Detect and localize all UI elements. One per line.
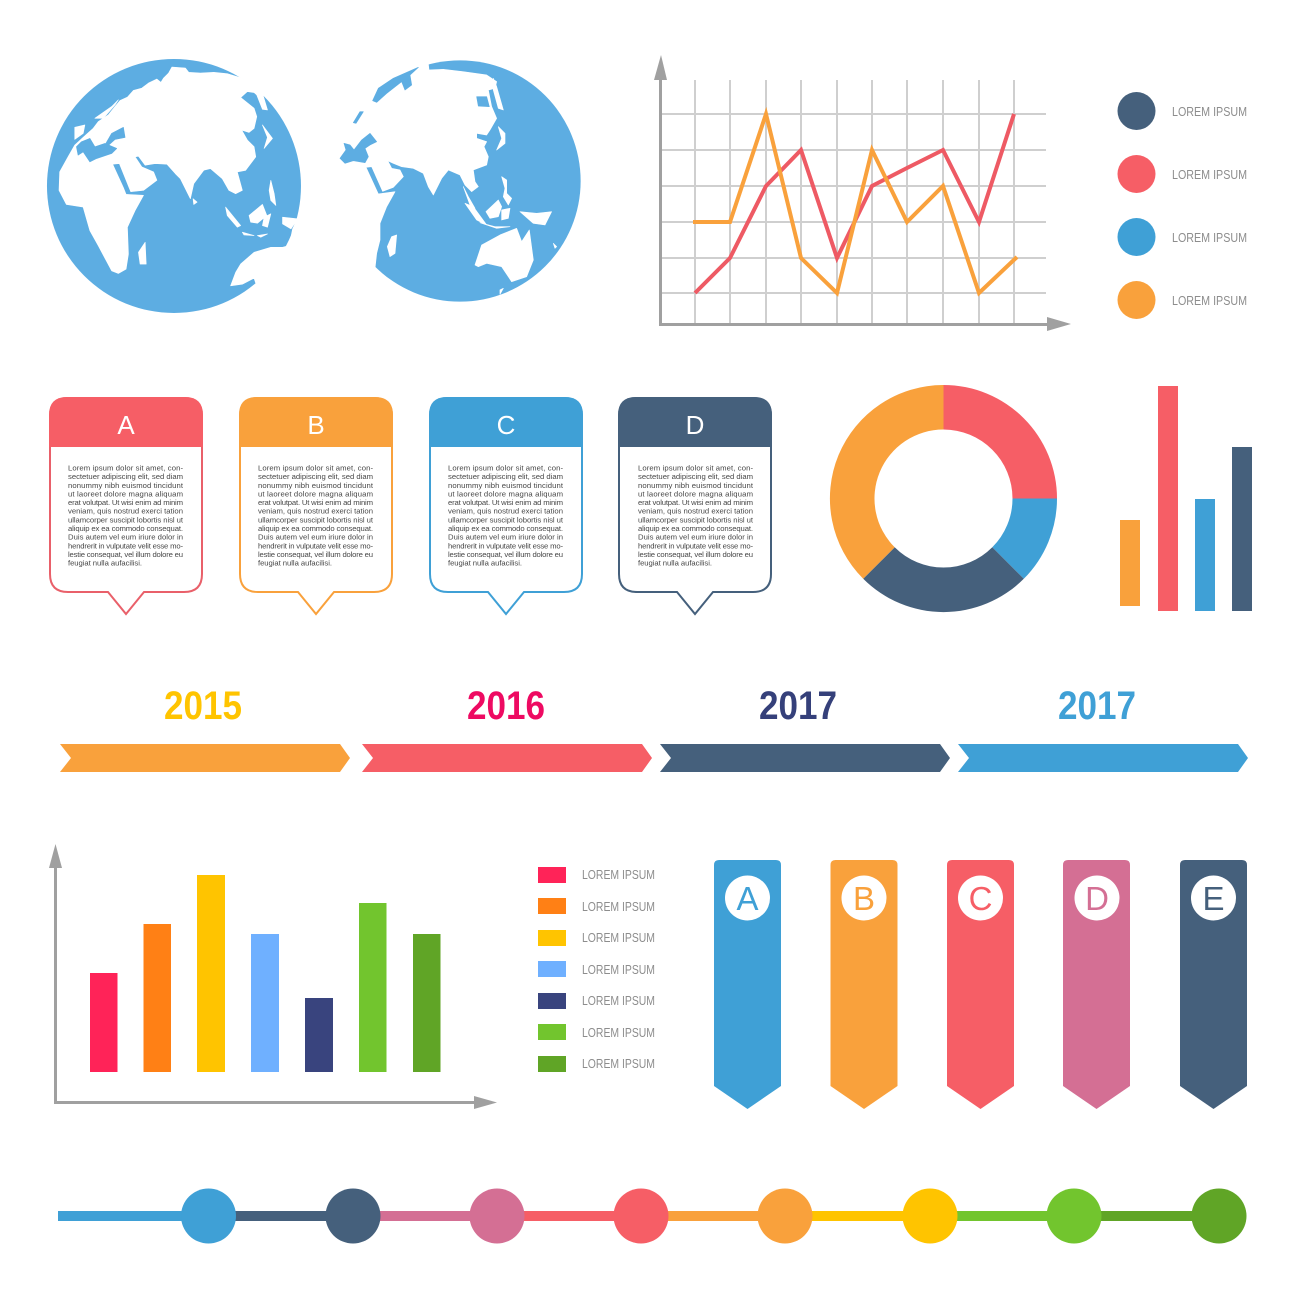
card D text: Lorem ipsum dolor sit amet, con- — [638, 464, 753, 472]
orange data line — [693, 114, 1017, 293]
legend: bar chart: LOREM IPSUM — [582, 993, 655, 1008]
globe: Asia and Australia view — [323, 47, 581, 302]
card C text: feugiat nulla aufacilisi. — [448, 558, 522, 568]
panel: line chart — [654, 55, 1071, 331]
ribbon E: E — [1202, 880, 1225, 917]
ribbon C: C — [969, 880, 992, 917]
card C text: veniam, quis nostrud exerci tation — [448, 507, 563, 516]
card A text: aliquip ex ea commodo consequat. — [68, 524, 183, 533]
panel: card B: B — [307, 410, 325, 440]
card B text: ut laoreet dolore magna aliquam — [258, 489, 373, 498]
card B text: aliquip ex ea commodo consequat. — [258, 524, 373, 533]
legend: line chart: LOREM IPSUM — [1172, 167, 1247, 182]
card A text: feugiat nulla aufacilisi. — [68, 558, 142, 568]
legend: bar chart: LOREM IPSUM — [582, 962, 655, 977]
ribbon C — [947, 860, 1014, 1109]
card B text — [258, 464, 374, 568]
panel: card B — [239, 397, 393, 614]
panel: bar chart — [49, 844, 497, 1109]
legend: line chart: LOREM IPSUM — [1172, 230, 1247, 245]
card B text: erat volutpat. Ut wisi enim ad minim — [258, 498, 373, 507]
card C text — [448, 464, 564, 568]
card B text: Duis autem vel eum iriure dolor in — [258, 533, 373, 542]
card A text — [68, 464, 184, 568]
ribbon D: D — [1085, 880, 1109, 917]
ribbon A: A — [736, 880, 759, 917]
card D text: veniam, quis nostrud exerci tation — [638, 507, 753, 516]
card C text: sectetuer adipiscing elit, sed diam — [448, 472, 563, 481]
card A text: lestie consequat, vel illum dolore eu — [68, 550, 183, 559]
donut chart — [830, 385, 1057, 612]
bar chart axes — [49, 844, 497, 1109]
card C text: ut laoreet dolore magna aliquam — [448, 489, 563, 498]
card B text: ullamcorper suscipit lobortis nisl ut — [258, 515, 374, 524]
card B text: lestie consequat, vel illum dolore eu — [258, 550, 373, 559]
card D text: aliquip ex ea commodo consequat. — [638, 524, 753, 533]
timeline year labels — [164, 684, 1136, 728]
card D text: ut laoreet dolore magna aliquam — [638, 489, 753, 498]
card B text: veniam, quis nostrud exerci tation — [258, 507, 373, 516]
panel: card D: D — [686, 410, 704, 440]
chart grid — [662, 80, 1046, 325]
legend: bar chart — [538, 867, 655, 1072]
card D text — [638, 464, 754, 568]
card D text: sectetuer adipiscing elit, sed diam — [638, 472, 753, 481]
panel: card A: A — [117, 410, 135, 440]
card D text: nonummy nibh euismod tincidunt — [638, 481, 754, 490]
legend: line chart — [1118, 92, 1247, 319]
panel: card C — [429, 397, 583, 614]
panel: card C: C — [497, 410, 515, 440]
ribbon E — [1180, 860, 1247, 1109]
legend: line chart: LOREM IPSUM — [1172, 104, 1247, 119]
ribbon B: B — [853, 880, 875, 917]
card C text: aliquip ex ea commodo consequat. — [448, 524, 563, 533]
card A text: Duis autem vel eum iriure dolor in — [68, 533, 183, 542]
legend: bar chart: LOREM IPSUM — [582, 930, 655, 945]
globe: Africa and Asia view — [47, 59, 308, 313]
red data line — [695, 114, 1014, 293]
card C text: ullamcorper suscipit lobortis nisl ut — [448, 515, 564, 524]
timeline year labels: 2016 — [467, 684, 545, 728]
card A text: hendrerit in vulputate velit esse mo- — [68, 541, 183, 550]
card A text: Lorem ipsum dolor sit amet, con- — [68, 464, 183, 472]
card A text: nonummy nibh euismod tincidunt — [68, 481, 184, 490]
card D text: ullamcorper suscipit lobortis nisl ut — [638, 515, 754, 524]
card B text: hendrerit in vulputate velit esse mo- — [258, 541, 373, 550]
ribbon B — [830, 860, 898, 1109]
card D text: feugiat nulla aufacilisi. — [638, 558, 712, 568]
card C text: hendrerit in vulputate velit esse mo- — [448, 541, 563, 550]
small bar chart — [1120, 386, 1252, 611]
legend: line chart: LOREM IPSUM — [1172, 293, 1247, 308]
card A text: ut laoreet dolore magna aliquam — [68, 489, 183, 498]
card B text: feugiat nulla aufacilisi. — [258, 558, 332, 568]
card C text: erat volutpat. Ut wisi enim ad minim — [448, 498, 563, 507]
line chart axes — [654, 55, 1071, 331]
legend: bar chart: LOREM IPSUM — [582, 1025, 655, 1040]
card D text: lestie consequat, vel illum dolore eu — [638, 550, 753, 559]
timeline year labels: 2017 — [1058, 684, 1136, 728]
legend: bar chart: LOREM IPSUM — [582, 867, 655, 882]
card A text: erat volutpat. Ut wisi enim ad minim — [68, 498, 183, 507]
panel: globes — [47, 47, 581, 313]
card B text: sectetuer adipiscing elit, sed diam — [258, 472, 373, 481]
ribbon A — [714, 860, 781, 1109]
card D text: Duis autem vel eum iriure dolor in — [638, 533, 753, 542]
legend: bar chart: LOREM IPSUM — [582, 899, 655, 914]
card C text: Lorem ipsum dolor sit amet, con- — [448, 464, 563, 472]
card A text: veniam, quis nostrud exerci tation — [68, 507, 183, 516]
ribbon D — [1063, 860, 1130, 1109]
card C text: nonummy nibh euismod tincidunt — [448, 481, 564, 490]
panel: card A — [49, 397, 203, 614]
card A text: sectetuer adipiscing elit, sed diam — [68, 472, 183, 481]
card C text: Duis autem vel eum iriure dolor in — [448, 533, 563, 542]
card D text: erat volutpat. Ut wisi enim ad minim — [638, 498, 753, 507]
card B text: Lorem ipsum dolor sit amet, con- — [258, 464, 373, 472]
bars — [90, 875, 440, 1072]
card A text: ullamcorper suscipit lobortis nisl ut — [68, 515, 184, 524]
card B text: nonummy nibh euismod tincidunt — [258, 481, 374, 490]
legend: bar chart: LOREM IPSUM — [582, 1056, 655, 1071]
timeline arrows — [60, 744, 1248, 772]
timeline year labels: 2015 — [164, 684, 242, 728]
timeline year labels: 2017 — [759, 684, 837, 728]
card D text: hendrerit in vulputate velit esse mo- — [638, 541, 753, 550]
panel: card D — [618, 397, 772, 614]
card C text: lestie consequat, vel illum dolore eu — [448, 550, 563, 559]
bottom dot timeline — [58, 1188, 1246, 1244]
